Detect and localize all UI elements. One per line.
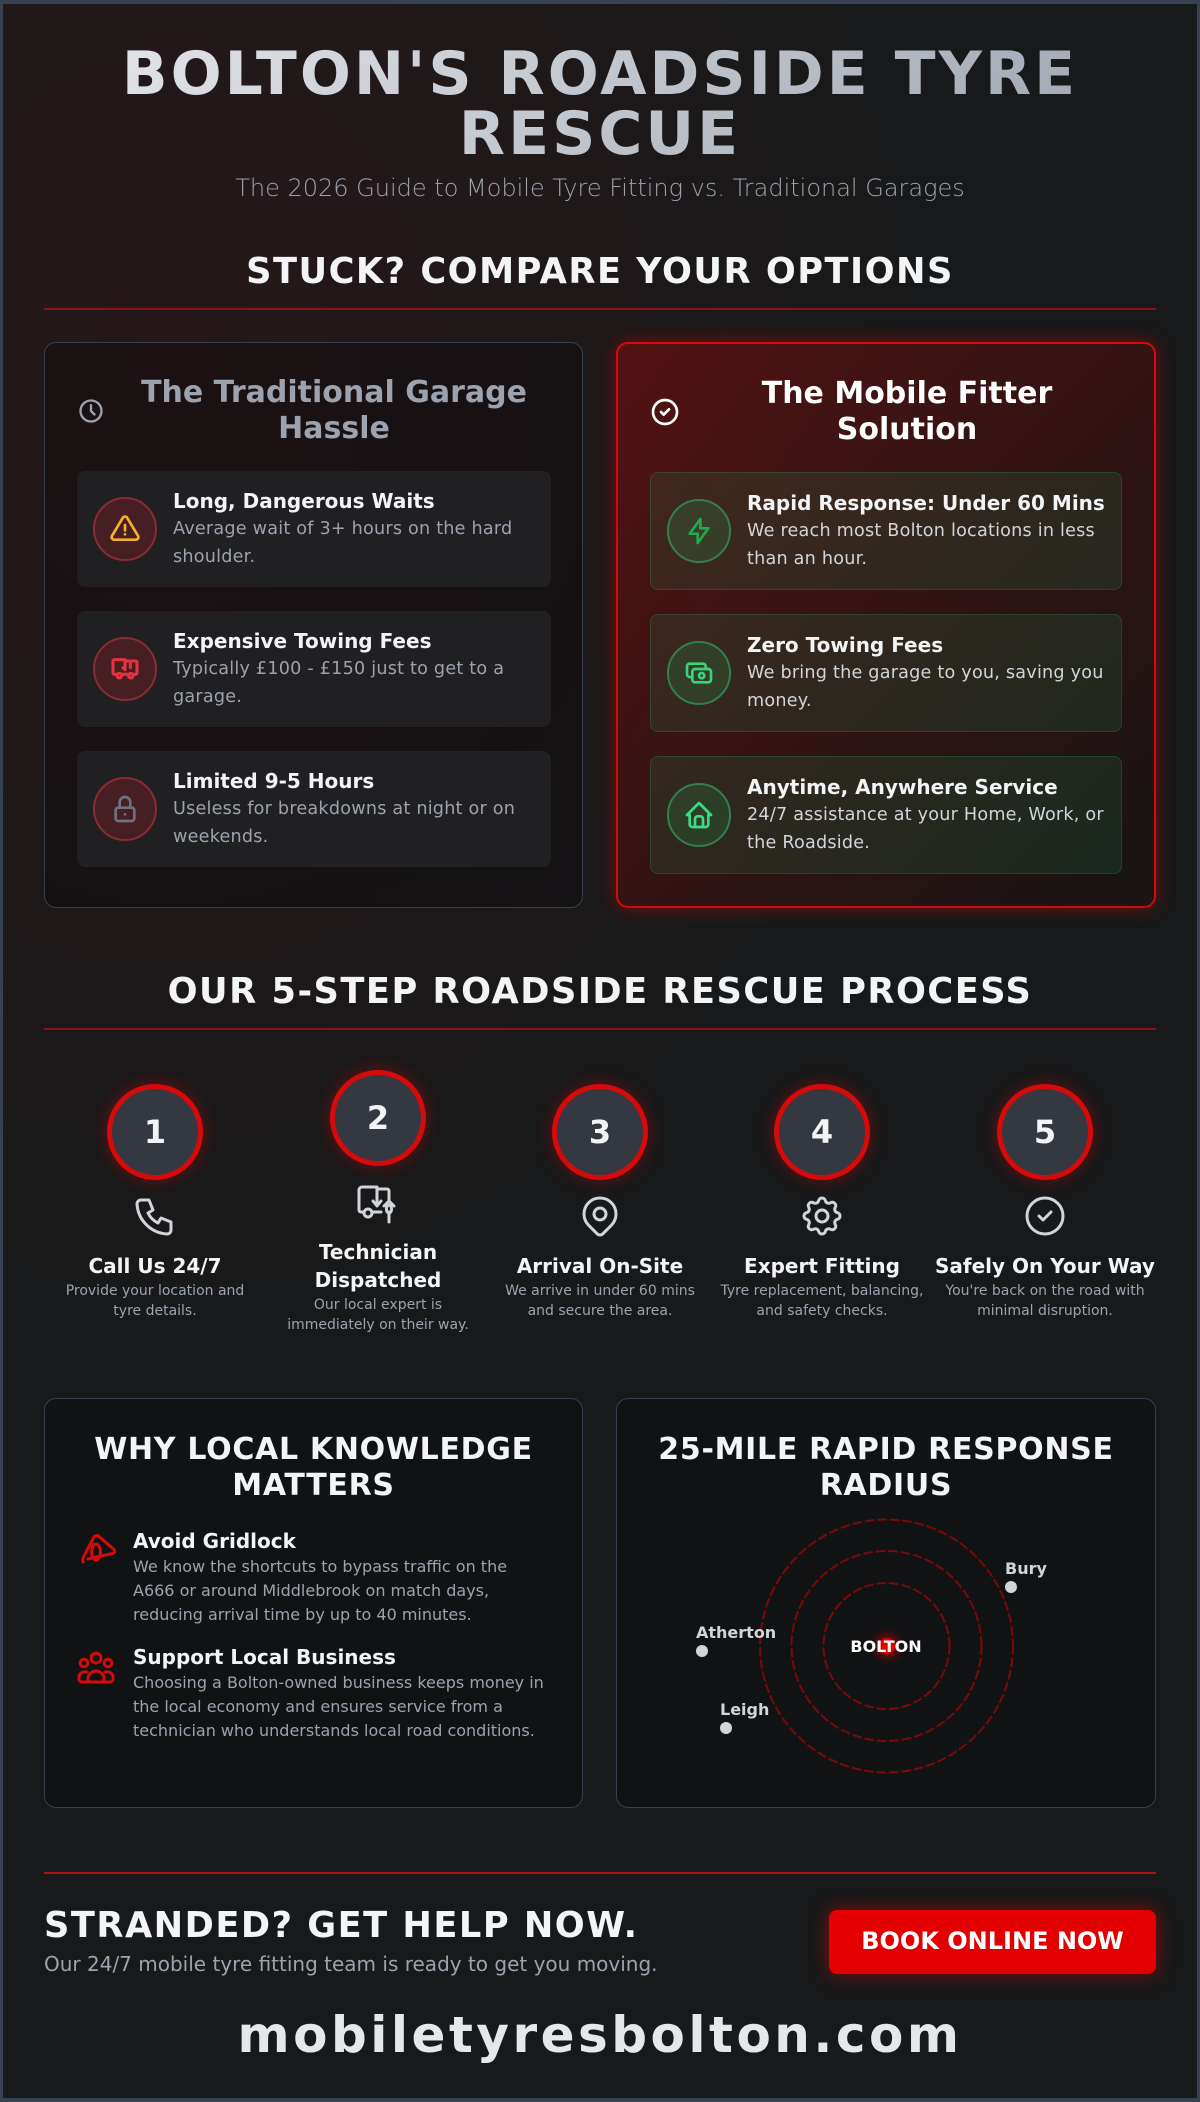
heading: mobile fitter solution: Solution — [837, 412, 977, 447]
text: towing description — [172, 659, 504, 707]
step 5 icon: check circle — [1026, 1196, 1064, 1236]
step 3 number — [552, 1084, 648, 1180]
step 2 icon: dispatched truck — [358, 1186, 396, 1224]
item: limited hours — [77, 751, 551, 867]
icon: check circle — [652, 398, 678, 426]
icon: clock — [79, 399, 103, 423]
button: book online: BOOK ONLINE NOW — [861, 1927, 1124, 1955]
step 3 description: We arrive in under 60 mins — [505, 1283, 695, 1299]
step 4 icon: gear — [802, 1196, 842, 1236]
marker: Leigh: Leigh — [720, 1700, 769, 1719]
callout: stranded heading: STRANDED? GET HELP NOW. — [44, 1905, 639, 1946]
step 3 number: 3 — [589, 1113, 611, 1151]
heading: local knowledge: MATTERS — [232, 1468, 395, 1503]
marker: Atherton — [696, 1623, 776, 1657]
text: towing description: garage. — [173, 687, 242, 707]
title: RESCUE — [459, 99, 741, 169]
text: support local description: Choosing a Bolton-owned business keeps money in — [133, 1673, 544, 1692]
step 4 title: Expert Fitting — [744, 1254, 900, 1278]
text: rapid description — [747, 521, 1095, 569]
step 1 number: 1 — [144, 1113, 166, 1151]
step 3 icon: map pin — [582, 1196, 618, 1236]
icon: warning triangle — [93, 497, 157, 561]
text: avoid gridlock description — [133, 1557, 507, 1624]
icon: cash — [667, 641, 731, 705]
step 4 description — [720, 1283, 924, 1319]
heading: rapid response radius — [658, 1432, 1114, 1503]
step 2 title: Technician — [319, 1240, 437, 1264]
website address: mobiletyresbolton.com — [238, 2006, 962, 2064]
panel: radius map — [616, 1398, 1156, 1808]
text: zero towing description: We bring the garage to you, saving you — [747, 663, 1104, 683]
step 2 description: immediately on their way. — [287, 1317, 469, 1333]
text: rapid title: Rapid Response: Under 60 Mins — [747, 491, 1105, 515]
item: towing fees — [77, 611, 551, 727]
step 2 number — [330, 1070, 426, 1166]
text: support local title: Support Local Business — [133, 1645, 396, 1669]
text: zero towing description — [747, 663, 1104, 711]
panel: traditional garage — [44, 342, 583, 908]
label: Bolton: BOLTON — [850, 1637, 922, 1656]
callout: stranded text: Our 24/7 mobile tyre fitting team is ready to get you moving. — [44, 1952, 658, 1976]
step 2 number: 2 — [367, 1099, 389, 1137]
step 5 description: minimal disruption. — [977, 1303, 1113, 1319]
text: anytime title: Anytime, Anywhere Service — [747, 775, 1058, 799]
text: long waits title: Long, Dangerous Waits — [173, 489, 435, 513]
icon: padlock — [93, 777, 157, 841]
item: anytime anywhere — [650, 756, 1122, 874]
centre point — [879, 1638, 895, 1654]
item: long waits — [77, 471, 551, 587]
heading: traditional garage hassle: Hassle — [278, 411, 390, 446]
step 4 description: Tyre replacement, balancing, — [720, 1283, 924, 1299]
item: rapid response — [650, 472, 1122, 590]
text: avoid gridlock description: A666 or around Middlebrook on match days, — [133, 1581, 489, 1600]
heading: compare your options: STUCK? COMPARE YOUR OPTIONS — [246, 251, 954, 292]
icon: gridlock — [81, 1534, 116, 1564]
step 2 description — [287, 1297, 469, 1333]
icon: tow truck — [93, 637, 157, 701]
marker: Bury: Bury — [1005, 1559, 1047, 1578]
subtitle: The 2026 Guide to Mobile Tyre Fitting vs. Traditional Garages — [235, 174, 965, 202]
text: towing description: Typically £100 - £150 just to get to a — [173, 659, 504, 679]
heading: rapid response radius: RADIUS — [820, 1468, 952, 1503]
icon: home — [667, 783, 731, 847]
step 4 description: and safety checks. — [756, 1303, 888, 1319]
text: support local description: the local economy and ensures service from a — [133, 1697, 503, 1716]
step 3 title: Arrival On-Site — [517, 1254, 683, 1278]
step 1 description — [66, 1283, 244, 1319]
step 2 description: Our local expert is — [314, 1297, 442, 1313]
heading: traditional garage hassle — [141, 375, 527, 446]
step 4 number: 4 — [811, 1113, 833, 1151]
step 2 title — [315, 1240, 441, 1292]
step 5 number — [997, 1084, 1093, 1180]
text: limited hours description — [173, 799, 515, 847]
step 3 description — [505, 1283, 695, 1319]
text: anytime description — [747, 805, 1104, 853]
step 5 description — [945, 1283, 1145, 1319]
step 1 description: Provide your location and — [66, 1283, 244, 1299]
step 4 number — [774, 1084, 870, 1180]
step 1 title: Call Us 24/7 — [88, 1254, 222, 1278]
icon: bolt — [667, 499, 731, 563]
text: support local description: technician who understands local road conditions. — [133, 1721, 535, 1740]
panel: mobile fitter — [616, 342, 1156, 908]
item: zero towing — [650, 614, 1122, 732]
heading: rapid response radius: 25-MILE RAPID RESPONSE — [658, 1432, 1114, 1467]
text: avoid gridlock description: We know the shortcuts to bypass traffic on the — [133, 1557, 507, 1576]
heading: traditional garage hassle: The Traditional Garage — [141, 375, 527, 410]
marker: Bury — [1005, 1559, 1047, 1593]
step 2 title: Dispatched — [315, 1268, 441, 1292]
text: avoid gridlock title: Avoid Gridlock — [133, 1529, 296, 1553]
text: long waits description: shoulder. — [173, 547, 255, 567]
button: book online — [829, 1910, 1156, 1974]
heading: local knowledge: WHY LOCAL KNOWLEDGE — [94, 1432, 533, 1467]
icon: people group — [78, 1652, 114, 1684]
text: rapid description: than an hour. — [747, 549, 867, 569]
panel: local knowledge — [44, 1398, 583, 1808]
marker: Leigh — [720, 1700, 769, 1734]
text: long waits description: Average wait of 3+ hours on the hard — [173, 519, 512, 539]
text: rapid description: We reach most Bolton locations in less — [747, 521, 1095, 541]
step 1 description: tyre details. — [113, 1303, 197, 1319]
text: limited hours description: Useless for breakdowns at night or on — [173, 799, 515, 819]
text: long waits description — [173, 519, 512, 567]
heading: mobile fitter solution: The Mobile Fitter — [762, 376, 1052, 411]
heading: local knowledge — [94, 1432, 533, 1503]
step 3 description: and secure the area. — [528, 1303, 672, 1319]
step 5 title: Safely On Your Way — [935, 1254, 1155, 1278]
title — [44, 44, 1156, 164]
text: zero towing title: Zero Towing Fees — [747, 633, 943, 657]
text: avoid gridlock description: reducing arrival time by up to 40 minutes. — [133, 1605, 472, 1624]
text: support local description — [133, 1673, 544, 1740]
text: zero towing description: money. — [747, 691, 812, 711]
text: limited hours title: Limited 9-5 Hours — [173, 769, 374, 793]
text: anytime description: 24/7 assistance at your Home, Work, or — [747, 805, 1104, 825]
marker: Atherton: Atherton — [696, 1623, 776, 1642]
step 5 number: 5 — [1034, 1113, 1056, 1151]
text: limited hours description: weekends. — [173, 827, 268, 847]
chart: radius rings — [759, 1518, 1014, 1774]
text: towing title: Expensive Towing Fees — [173, 629, 431, 653]
heading: 5-step process: OUR 5-STEP ROADSIDE RESCUE PROCESS — [168, 971, 1032, 1012]
step 1 icon: phone — [136, 1198, 172, 1236]
text: anytime description: the Roadside. — [747, 833, 870, 853]
heading: mobile fitter solution — [762, 376, 1052, 447]
step 5 description: You're back on the road with — [945, 1283, 1145, 1299]
step 1 number — [107, 1084, 203, 1180]
title: BOLTON'S ROADSIDE TYRE — [122, 39, 1078, 109]
